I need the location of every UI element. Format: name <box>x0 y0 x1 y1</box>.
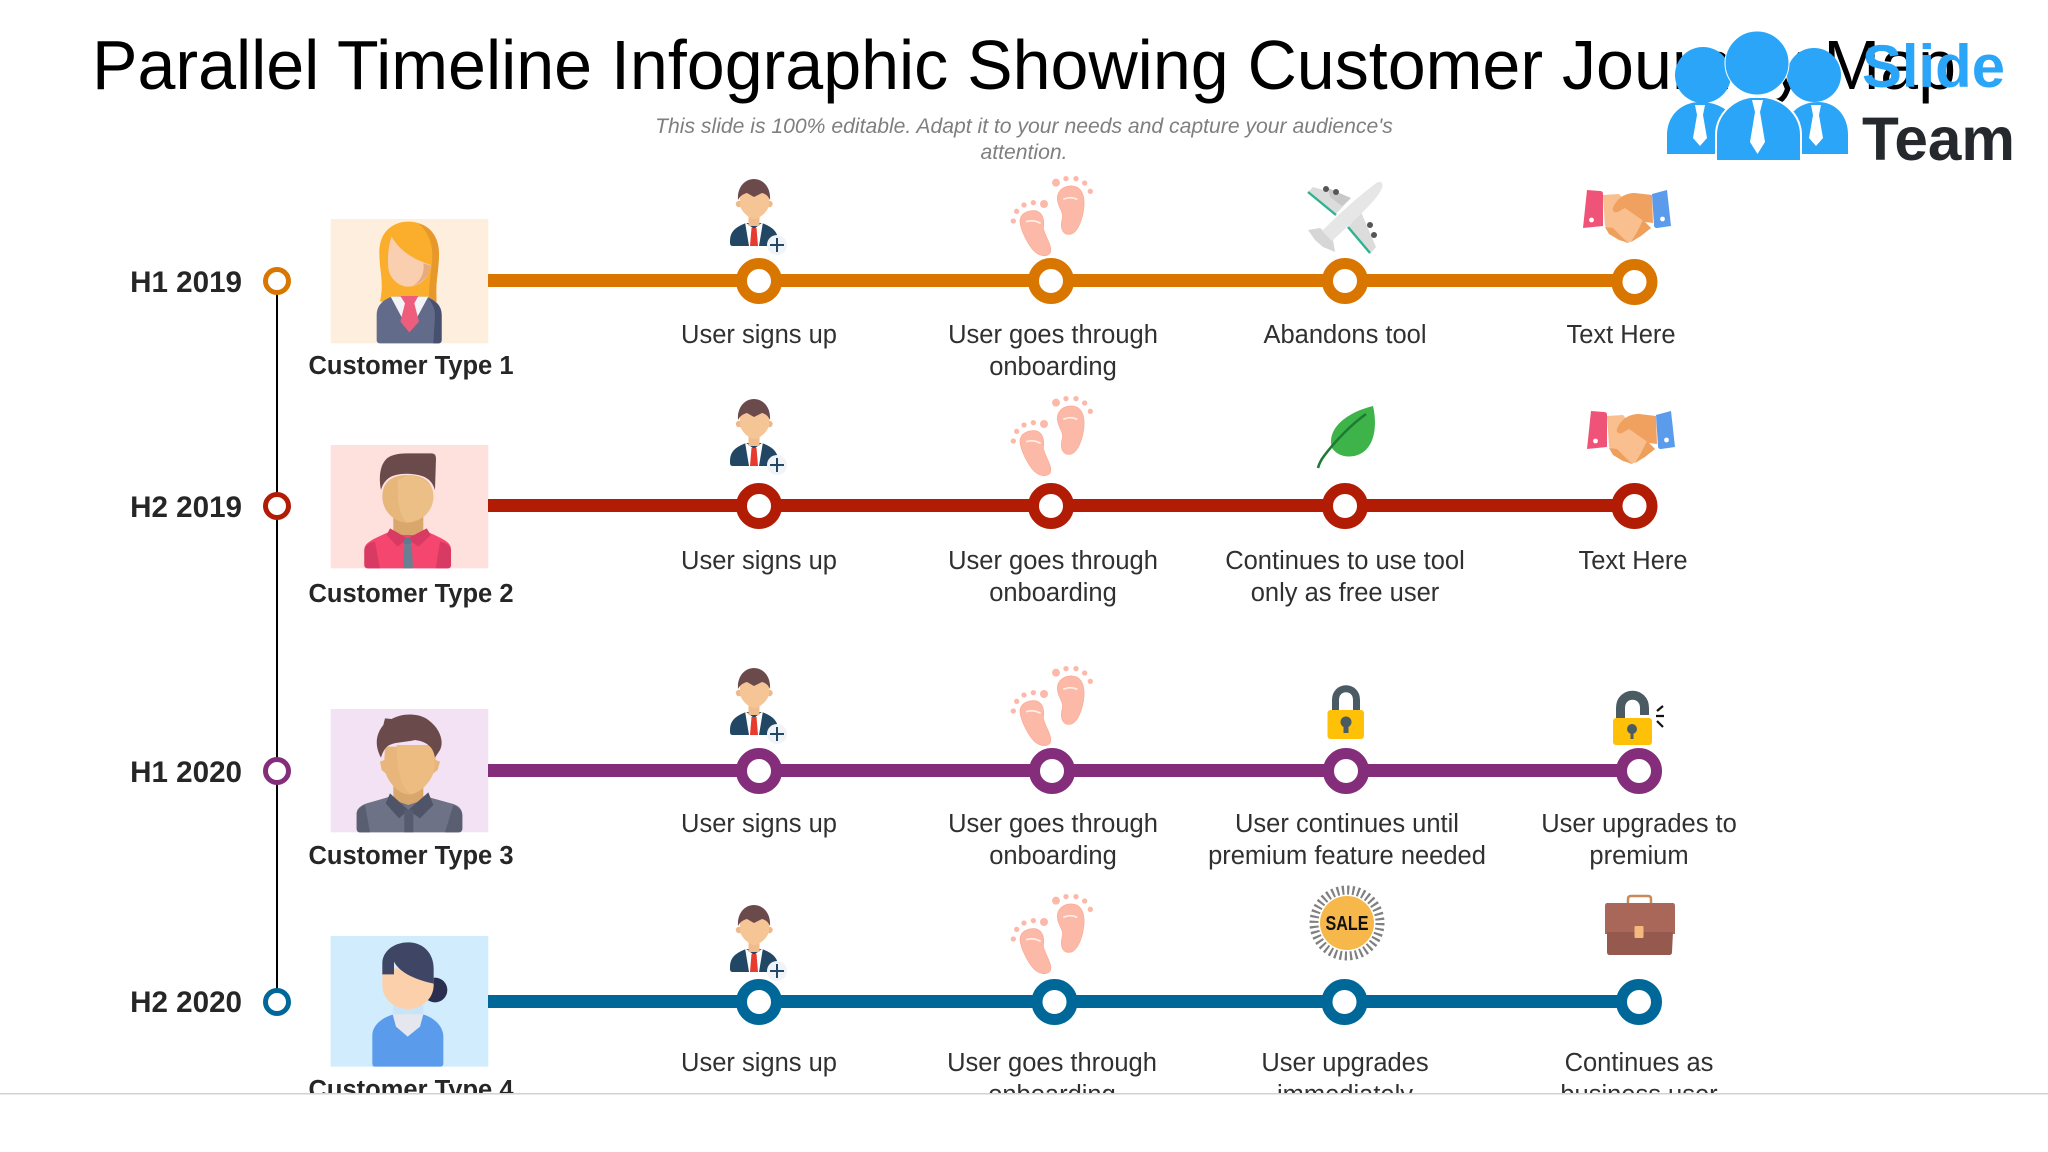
avatar: customer type 1 <box>331 219 488 343</box>
logo: SlideTeam <box>1667 31 2015 173</box>
node labels: User continues until <box>1235 810 1459 838</box>
icon: footprints <box>1011 176 1093 256</box>
year label: H2 2020 <box>130 986 242 1019</box>
node labels: only as free user <box>1251 579 1440 607</box>
icon: user sign up <box>730 668 787 744</box>
panel: row H2 2019 <box>130 396 1688 608</box>
title: Parallel Timeline Infographic Showing Customer Journey Map <box>92 26 1956 104</box>
icon: user sign up <box>730 905 787 981</box>
avatar: customer type 4 <box>331 936 488 1067</box>
node rings <box>742 754 1656 788</box>
node labels: User goes through <box>948 810 1158 838</box>
vertical timeline connector <box>276 281 278 1002</box>
node labels: User signs up <box>681 321 837 349</box>
icon: airplane <box>1308 182 1383 254</box>
node labels: onboarding <box>989 579 1117 607</box>
panel: row H1 2020 <box>130 666 1737 870</box>
node labels <box>681 810 1737 870</box>
timeline dot <box>266 270 288 292</box>
year label: H1 2020 <box>130 756 242 789</box>
node labels <box>681 321 1676 381</box>
node labels: onboarding <box>988 1081 1116 1109</box>
node labels: premium feature needed <box>1208 842 1486 870</box>
icon: padlock open <box>1613 695 1664 745</box>
subtitle: This slide is 100% editable. Adapt it to your needs and capture your audience's <box>655 115 1393 138</box>
logo people icon <box>1667 31 1848 161</box>
icon: sale badge: SALE <box>1326 913 1368 935</box>
timeline dot <box>266 760 288 782</box>
icon: sale badge <box>1314 890 1380 956</box>
subtitle: attention. <box>981 141 1067 164</box>
node labels: User signs up <box>681 810 837 838</box>
icon: leaf <box>1318 406 1375 468</box>
icon: user sign up <box>730 399 787 475</box>
timeline dot <box>266 990 288 1014</box>
node labels <box>681 547 1688 607</box>
timeline bar <box>488 499 1634 512</box>
node labels: Text Here <box>1566 321 1676 349</box>
bottom strip <box>0 1093 2048 1152</box>
node labels: User upgrades to <box>1541 810 1737 838</box>
node labels: business user <box>1560 1081 1718 1109</box>
icon: footprints <box>1011 894 1093 974</box>
year label: H1 2019 <box>130 266 242 299</box>
node rings <box>742 488 1652 524</box>
node labels: onboarding <box>989 353 1117 381</box>
node labels: User goes through <box>948 547 1158 575</box>
timeline bar <box>488 995 1639 1008</box>
node labels: User signs up <box>681 547 837 575</box>
icon: padlock closed <box>1328 689 1364 739</box>
icon: footprints <box>1011 666 1093 746</box>
timeline bar <box>488 764 1639 777</box>
node labels: onboarding <box>989 842 1117 870</box>
customer label: Customer Type 2 <box>308 580 514 608</box>
icon: user sign up <box>730 179 787 255</box>
node labels: Abandons tool <box>1263 321 1427 349</box>
subtitle <box>655 115 1393 164</box>
node labels: Continues to use tool <box>1225 547 1465 575</box>
avatar: customer type 3 <box>331 709 488 832</box>
customer label: Customer Type 1 <box>308 352 514 380</box>
logo wordmark: Slide <box>1862 33 2005 100</box>
node labels: User upgrades <box>1261 1049 1429 1077</box>
node rings <box>742 984 1656 1020</box>
node labels: Text Here <box>1578 547 1688 575</box>
node labels: User goes through <box>947 1049 1157 1077</box>
icon: handshake <box>1583 190 1671 243</box>
panel: row H1 2019 <box>130 176 1676 381</box>
icon: handshake <box>1587 411 1675 464</box>
icon: briefcase <box>1605 896 1675 955</box>
node labels <box>681 1049 1718 1109</box>
node labels: User signs up <box>681 1049 837 1077</box>
customer label: Customer Type 3 <box>308 842 514 870</box>
year label: H2 2019 <box>130 491 242 524</box>
node labels: Continues as <box>1565 1049 1713 1077</box>
timeline bar <box>488 274 1634 287</box>
customer label: Customer Type 4 <box>308 1076 514 1104</box>
node labels: User goes through <box>948 321 1158 349</box>
logo: SlideTeam: Team <box>1862 105 2015 173</box>
node rings <box>742 264 1652 300</box>
icon: footprints <box>1011 396 1093 476</box>
node labels: immediately <box>1277 1081 1413 1109</box>
panel: row H2 2020 <box>130 890 1718 1109</box>
node labels: premium <box>1589 842 1689 870</box>
avatar: customer type 2 <box>331 445 488 568</box>
timeline dot <box>266 494 288 518</box>
